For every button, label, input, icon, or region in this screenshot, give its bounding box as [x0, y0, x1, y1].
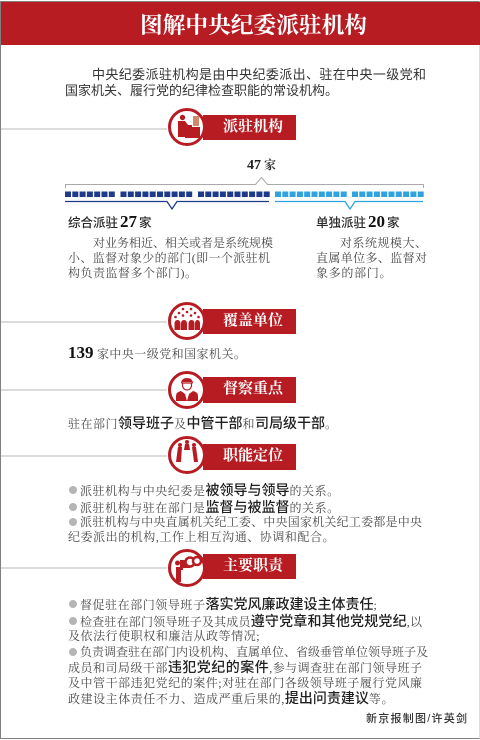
credit: 新京报制图/许英剑: [366, 713, 467, 725]
column heading: 综合派驻27家: [68, 212, 152, 231]
icon: audience: [168, 302, 203, 340]
label: 主要职责: [223, 558, 283, 574]
column: 综合派驻: [68, 212, 273, 280]
bullet: [69, 600, 77, 608]
section header: 派驻机构: [1, 108, 296, 146]
duties list: 及依法行使职权和廉洁从政等情况;: [68, 629, 260, 643]
bullet: [69, 518, 77, 526]
intro text: [65, 67, 426, 98]
bullet: [69, 617, 77, 625]
supervision text: 驻在部门领导班子及中管干部和司局级干部。: [68, 415, 338, 431]
label: 职能定位: [223, 448, 283, 464]
intro text: 国家机关、履行党的纪律检查职能的常设机构。: [65, 83, 338, 98]
duties list: 政建设主体责任不力、造成严重后果的,提出问责建议等。: [68, 690, 394, 706]
label: 派驻机构: [223, 119, 283, 135]
icon: person with binoculars: [168, 549, 203, 587]
column text: 对系统规模大、: [340, 236, 427, 250]
label: 覆盖单位: [223, 313, 283, 329]
bracket total: [65, 176, 424, 210]
title: 图解中央纪委派驻机构: [140, 13, 367, 38]
role list: 纪委派出的机构,工作上相互沟通、协调和配合。: [68, 530, 335, 544]
duties list: 检查驻在部门领导班子及其成员遵守党章和其他党规党纪,以: [80, 613, 422, 629]
icon: figures on road: [168, 436, 203, 474]
column heading: 单独派驻20家: [316, 212, 400, 231]
total 47: 47 家: [247, 158, 276, 173]
icon: official: [168, 371, 203, 409]
section header: 主要职责: [1, 549, 296, 587]
role list: 派驻机构与中央纪委是被领导与领导的关系。: [80, 482, 340, 498]
section header: 职能定位: [1, 436, 296, 474]
icon: person at desk: [168, 108, 203, 146]
coverage text: 139 家中央一级党和国家机关。: [68, 343, 246, 362]
column: 单独派驻: 象多的部门。: [316, 266, 392, 280]
column: 综合派驻: 构负责监督多个部门)。: [68, 266, 198, 280]
section header: 覆盖单位: [1, 302, 296, 340]
bullet: [69, 648, 77, 656]
duties list: 及中管干部违犯党纪的案件;对驻在部门各级领导班子履行党风廉: [68, 676, 422, 690]
duties list: 督促驻在部门领导班子落实党风廉政建设主体责任;: [80, 596, 377, 612]
duties list: 成员和司局级干部违犯党纪的案件,参与调查驻在部门领导班子: [68, 659, 422, 675]
role list: 派驻机构与中央直属机关纪工委、中央国家机关纪工委都是中央: [80, 515, 422, 529]
column: 综合派驻: 小、监督对象少的部门(即一个派驻机: [68, 251, 270, 265]
title banner: [1, 2, 480, 45]
label: 督察重点: [223, 381, 283, 397]
column text: 对业务相近、相关或者是系统规模: [93, 236, 273, 250]
intro text: 中央纪委派驻机构是由中央纪委派出、驻在中央一级党和: [92, 67, 426, 82]
bullet: [69, 503, 77, 511]
section header: 督察重点: [1, 371, 296, 409]
role list: 派驻机构与驻在部门是监督与被监督的关系。: [80, 499, 340, 515]
column: 单独派驻: [316, 212, 427, 280]
column: 单独派驻: 直属单位多、监督对: [316, 251, 427, 265]
duties list: [68, 596, 428, 706]
role list: [68, 482, 422, 544]
bullet: [69, 486, 77, 494]
duties list: 负责调查驻在部门内设机构、直属单位、省级垂管单位领导班子及: [80, 645, 428, 659]
